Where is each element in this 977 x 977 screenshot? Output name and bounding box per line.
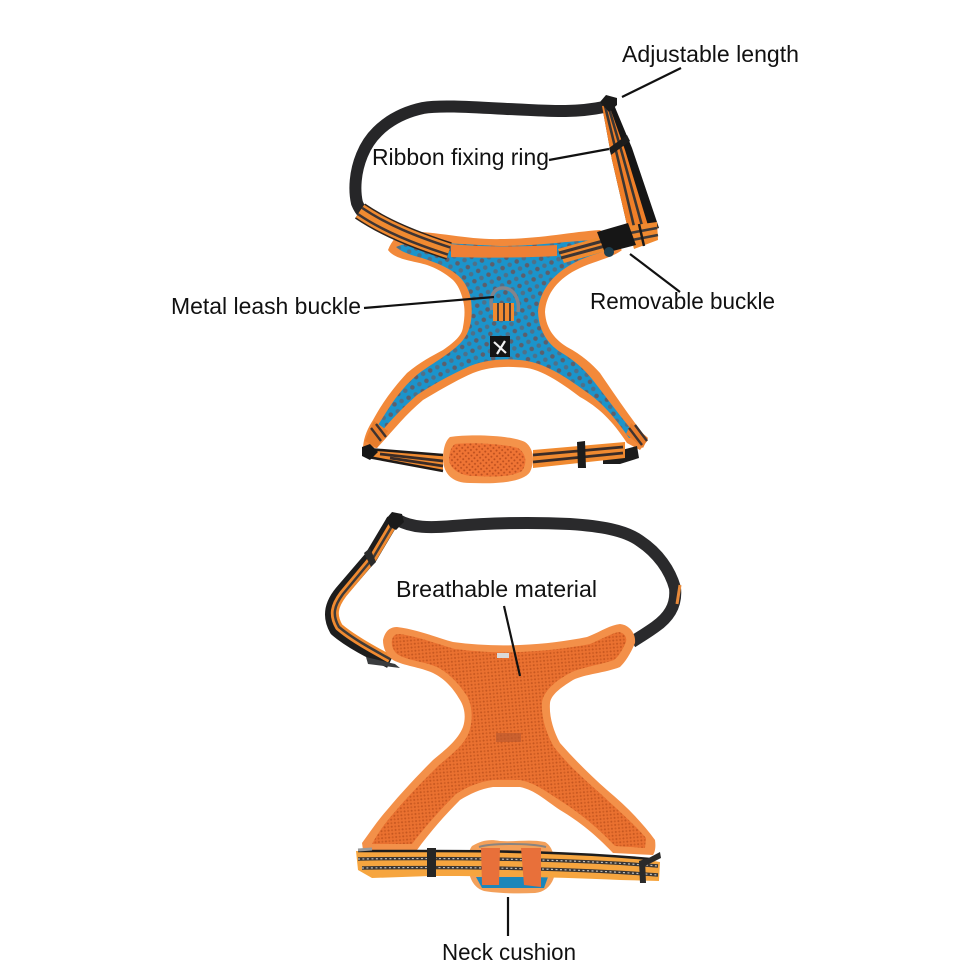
label: metal leash buckle: Metal leash buckle (171, 293, 361, 319)
black strap right (398, 520, 675, 642)
logo label (490, 336, 510, 357)
label: removable buckle (590, 254, 775, 314)
label: neck cushion (442, 897, 576, 965)
striped strap left (360, 211, 449, 251)
removable buckle (597, 222, 658, 257)
label: ribbon fixing ring: Ribbon fixing ring (372, 144, 549, 170)
bottom striped strap (356, 851, 660, 881)
side buckle (366, 657, 400, 668)
lower strap (362, 441, 639, 471)
strap keeper (427, 848, 436, 877)
vest body border (362, 624, 655, 855)
strap knot (386, 512, 404, 530)
vest body border (363, 230, 648, 450)
neck pad back (468, 840, 555, 893)
leader line (364, 297, 494, 308)
bottom harness: back view (331, 512, 680, 893)
label: breathable material (396, 576, 597, 676)
label: adjustable length: Adjustable length (622, 41, 799, 67)
side straps lower (365, 421, 648, 448)
blue mesh panel (371, 240, 637, 441)
orange edge on black strap (677, 585, 680, 604)
neck strip at top of vest (451, 244, 557, 258)
ribbon ring (364, 548, 376, 567)
label: removable buckle: Removable buckle (590, 288, 775, 314)
inner print (496, 733, 521, 742)
label: metal leash buckle (171, 293, 494, 319)
leader line (504, 606, 520, 676)
metal leash buckle (491, 288, 518, 321)
leader line (622, 68, 681, 97)
end slider (358, 849, 372, 850)
side adjuster (639, 852, 661, 883)
neck pad (443, 435, 533, 483)
striped strap right (602, 100, 659, 238)
small label on mesh (497, 653, 509, 658)
strap loops left and right on vest (558, 237, 606, 263)
leader line (549, 149, 609, 160)
leader line (630, 254, 680, 292)
pad loops (481, 848, 541, 887)
label: breathable material: Breathable material (396, 576, 597, 602)
orange breathable mesh (372, 632, 646, 848)
label: neck cushion: Neck cushion (442, 939, 576, 965)
top harness: front view (355, 95, 659, 483)
label: adjustable length (622, 41, 799, 97)
striped strap left (331, 520, 395, 662)
leader line (507, 897, 509, 936)
top strap knot (600, 95, 617, 112)
black strap loop (355, 106, 604, 214)
ribbon fixing ring (609, 135, 630, 155)
